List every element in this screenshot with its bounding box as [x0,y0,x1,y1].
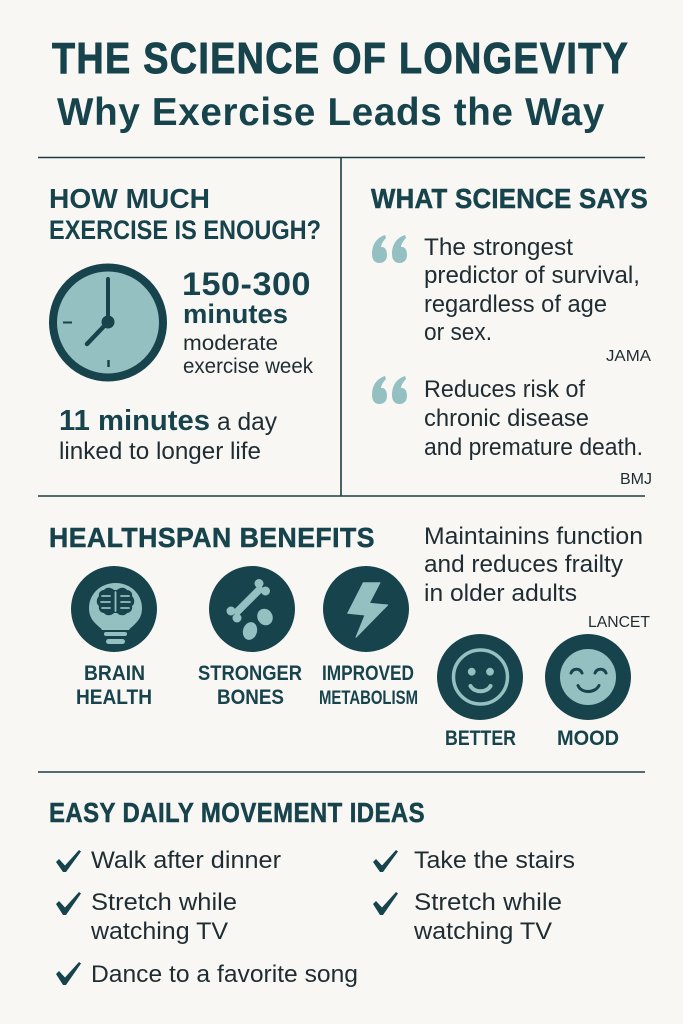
label: stronger bones [198,662,302,709]
text: maintains function: Maintainins function [424,523,643,550]
checklist item: stretch while watching TV right [373,889,562,945]
checklist item: take the stairs: Take the stairs [414,847,575,874]
text: maintains function: and reduces frailty [424,551,623,578]
quote: strongest predictor: predictor of survival, [424,262,640,289]
icon: lightning bolt [323,566,409,652]
title [52,34,629,134]
icon: quote mark 2 [372,376,407,404]
quote: reduces risk: chronic disease [424,405,589,432]
quote: strongest predictor: The strongest [424,234,573,261]
text: maintains function: LANCET [588,614,651,631]
quote: strongest predictor: JAMA [606,348,652,365]
checklist item: stretch while watching TV: Stretch while [91,889,237,916]
label: stronger bones: BONES [217,686,284,709]
stat: 150-300 minutes: minutes [183,299,288,329]
quote: reduces risk: and premature death. [424,434,643,461]
checklist item: dance to a favorite song: Dance to a favorite song [91,961,358,988]
quote: reduces risk: BMJ [620,471,652,488]
stat: 11 minutes a day: linked to longer life [59,438,261,465]
icon: quote mark 1 [372,235,407,263]
panel: how much exercise [49,183,321,465]
stat: 11 minutes a day [59,405,277,465]
label: better mood: BETTER [445,727,516,750]
label: better mood [445,727,619,750]
icon: smile filled [545,634,631,720]
label: improved metabolism: IMPROVED [322,662,414,685]
icon: smile outline [437,634,523,720]
panel: what science says [371,183,652,488]
heading: easy daily movement ideas: EASY DAILY MOVEMENT IDEAS [49,797,425,828]
panel: easy daily movement ideas [49,797,575,988]
panel: healthspan benefits [49,522,651,750]
icon: clock [53,268,163,378]
checklist item: stretch while watching TV: watching TV [90,918,228,945]
stat: 150-300 minutes: moderate [183,332,278,355]
stat: 11 minutes a day: 11 minutes [59,405,210,437]
icon: bones [209,566,295,652]
checklist item: stretch while watching TV [56,889,237,945]
heading: healthspan benefits: HEALTHSPAN BENEFITS [49,522,375,553]
checklist item: walk after dinner: Walk after dinner [91,847,281,874]
quote: strongest predictor: or sex. [424,319,492,346]
text: maintains function [424,523,651,631]
icon: brain bulb [71,566,157,652]
label: brain health [76,662,152,709]
stat: 150-300 minutes: exercise week [183,355,313,378]
heading: how much exercise is enough: EXERCISE IS ENOUGH? [49,215,321,245]
label: stronger bones: STRONGER [198,662,302,685]
text: maintains function: in older adults [424,580,577,607]
label: brain health: BRAIN [84,662,145,685]
label: brain health: HEALTH [76,686,152,709]
stat: 150-300 minutes: 150-300 [182,266,311,302]
quote: reduces risk: Reduces risk of [424,376,585,403]
label: improved metabolism [319,662,418,709]
stat: 11 minutes a day: a day [217,408,277,436]
quote: strongest predictor [424,234,652,365]
heading: how much exercise is enough: HOW MUCH [49,183,210,214]
quote: reduces risk [424,376,652,488]
stat: 150-300 minutes [182,266,313,378]
heading: how much exercise is enough [49,183,321,245]
title: Why Exercise Leads the Way [57,91,605,134]
label: improved metabolism: METABOLISM [319,688,418,709]
quote: strongest predictor: regardless of age [424,291,607,318]
checklist item: stretch while watching TV right: Stretch while [414,889,562,916]
heading: what science says: WHAT SCIENCE SAYS [371,183,648,214]
label: better mood: MOOD [557,727,619,750]
checklist item: stretch while watching TV right: watching TV [413,918,552,945]
